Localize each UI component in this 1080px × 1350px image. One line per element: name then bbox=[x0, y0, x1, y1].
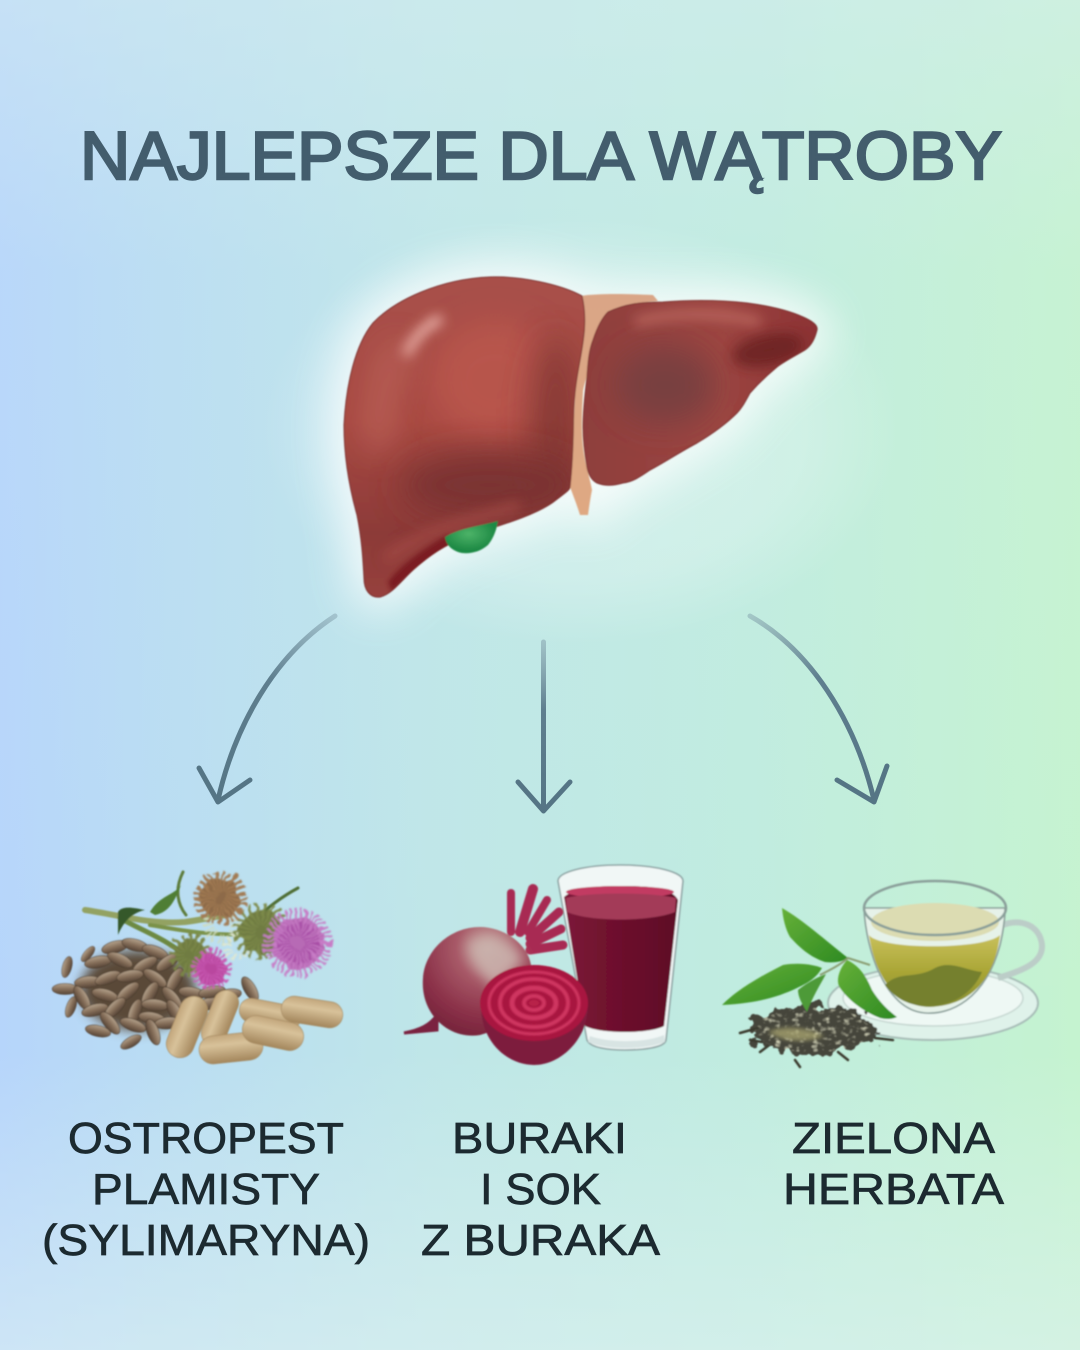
glass of beet juice bbox=[558, 865, 683, 1050]
arrow: liver to milk thistle bbox=[199, 616, 335, 802]
title: NAJLEPSZE DLA WĄTROBY bbox=[80, 118, 1002, 194]
tea liquid bbox=[869, 935, 1000, 1007]
capsules bbox=[162, 986, 345, 1065]
stems and leaves bbox=[85, 872, 298, 960]
gallbladder bbox=[445, 521, 498, 553]
glass cup bbox=[864, 908, 1005, 1013]
tea leaves bbox=[722, 908, 897, 1019]
label: green tea bbox=[783, 1115, 1004, 1214]
arrow: liver to green tea bbox=[750, 616, 887, 802]
arrow: liver to beetroot bbox=[518, 642, 570, 811]
illustration: milk thistle, seeds and capsules bbox=[52, 872, 345, 1065]
left lobe bbox=[583, 301, 817, 485]
label: milk thistle: PLAMISTY bbox=[92, 1166, 320, 1214]
right lobe bbox=[344, 277, 585, 597]
illustration: green tea cup, leaves and loose tea bbox=[722, 881, 1042, 1067]
label: green tea: HERBATA bbox=[783, 1166, 1004, 1214]
illustration: liver with gallbladder bbox=[300, 238, 848, 624]
label: beetroot: BURAKI bbox=[452, 1115, 627, 1163]
label: milk thistle bbox=[42, 1115, 370, 1265]
label: beetroot: Z BURAKA bbox=[421, 1217, 660, 1265]
seeds bbox=[52, 936, 262, 1052]
loose tea pile bbox=[740, 1005, 893, 1067]
thistle flower heads bbox=[174, 878, 324, 984]
cup handle bbox=[998, 922, 1042, 978]
beet stalks bbox=[511, 889, 563, 950]
label: beetroot: I SOK bbox=[480, 1166, 601, 1214]
whole beetroot bbox=[404, 927, 531, 1036]
label: green tea: ZIELONA bbox=[792, 1115, 995, 1163]
illustration: beetroot and juice glass bbox=[404, 865, 683, 1065]
label: beetroot bbox=[421, 1115, 660, 1265]
label: milk thistle: (SYLIMARYNA) bbox=[42, 1217, 370, 1265]
halved beetroot bbox=[480, 965, 588, 1065]
saucer bbox=[828, 966, 1038, 1040]
label: milk thistle: OSTROPEST bbox=[68, 1115, 344, 1163]
ligament bbox=[570, 294, 658, 515]
